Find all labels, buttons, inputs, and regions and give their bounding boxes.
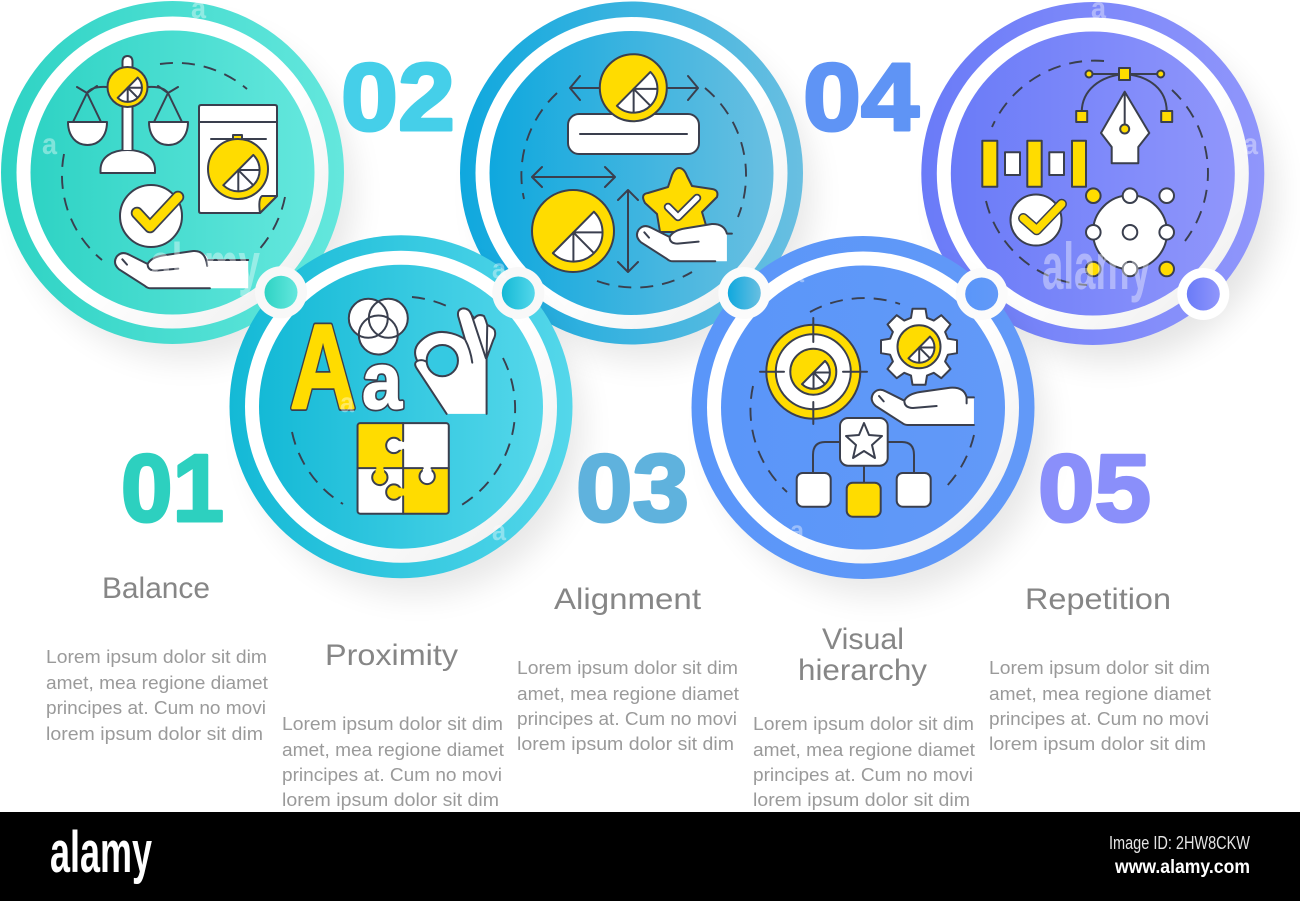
icon: gear with lemon: [881, 309, 957, 385]
icon: type specimen Aa: a: [362, 336, 402, 425]
icon: circle with anchor nodes: [1086, 188, 1174, 276]
heading: Visual hierarchy: [798, 623, 927, 687]
heading: Proximity: Proximity: [325, 639, 458, 672]
text block: Repetition: lorem ipsum dolor sit dim: [989, 733, 1206, 754]
connector dot 5: [1177, 268, 1229, 320]
text block: Visual hierarchy: amet, mea regione diamet: [753, 739, 975, 760]
icon: puzzle: [358, 423, 449, 514]
panel: circle 05 repetition: [921, 2, 1276, 362]
watermark overlays: a: [340, 387, 354, 418]
text block: Repetition: principes at. Cum no movi: [989, 708, 1209, 729]
text block: Alignment: Lorem ipsum dolor sit dim: [517, 657, 738, 678]
footer image id: Image ID: 2HW8CKW: [1109, 833, 1250, 853]
footer url: www.alamy.com: [1114, 857, 1250, 878]
connector dot 4: [956, 268, 1008, 320]
text block: Repetition: Lorem ipsum dolor sit dim: [989, 657, 1210, 678]
text block: Balance: principes at. Cum no movi: [46, 697, 266, 718]
text block: Balance: lorem ipsum dolor sit dim: [46, 723, 263, 744]
heading: Visual hierarchy: Visual: [822, 623, 904, 656]
connector dot 2: [492, 267, 544, 319]
icon: open hand: [115, 251, 248, 288]
text block: Proximity: amet, mea regione diamet: [282, 739, 504, 760]
watermark overlays: alamy: [1042, 229, 1151, 303]
text block: Alignment: principes at. Cum no movi: [517, 708, 737, 729]
connector dot 3: [718, 267, 770, 319]
number 01: 01: [121, 435, 224, 542]
icon: lower lemon with measure arrows: [532, 167, 638, 272]
icon: check badge: [120, 185, 182, 247]
icon: open hand: [872, 388, 974, 425]
icon: hierarchy chart: [797, 418, 931, 517]
text block: Visual hierarchy: principes at. Cum no movi: [753, 764, 973, 785]
icon: lemon target: [760, 318, 867, 424]
number 03: 03: [576, 435, 689, 542]
text block: Repetition: [989, 657, 1211, 754]
footer logo: alamy: [50, 820, 152, 885]
panel: circle 04 visual hierarchy: [692, 236, 1046, 596]
icon: venn circles: [349, 299, 408, 354]
watermark overlays: a: [42, 128, 57, 161]
icon: type specimen Aa: A: [290, 300, 356, 434]
icon: star in hand: [637, 168, 732, 261]
text block: Alignment: [517, 657, 739, 754]
watermark overlays: [42, 0, 1258, 546]
icon: balance scale: [68, 56, 188, 173]
icon: document with lemon: [199, 105, 277, 213]
icon: ok hand gesture: [415, 308, 495, 414]
text block: Visual hierarchy: Lorem ipsum dolor sit dim: [753, 713, 974, 734]
icon: alternating bars: [982, 141, 1086, 187]
heading: Visual hierarchy: hierarchy: [798, 654, 927, 687]
watermark overlays: a: [492, 515, 506, 546]
text block: Balance: amet, mea regione diamet: [46, 672, 268, 693]
panel: circle 01 balance: [1, 1, 354, 360]
text block: Proximity: principes at. Cum no movi: [282, 764, 502, 785]
number 04: 04: [803, 44, 919, 151]
panel: circle 02 proximity: [230, 235, 583, 595]
heading: Balance: Balance: [102, 572, 210, 605]
text block: Repetition: amet, mea regione diamet: [989, 683, 1211, 704]
text block: Proximity: Lorem ipsum dolor sit dim: [282, 713, 503, 734]
watermark overlays: a: [790, 257, 804, 288]
footer bar: [0, 812, 1300, 901]
text block: Visual hierarchy: [753, 713, 975, 810]
text block: Balance: [46, 646, 268, 744]
text block: Alignment: lorem ipsum dolor sit dim: [517, 733, 734, 754]
text block: Alignment: amet, mea regione diamet: [517, 683, 739, 704]
watermark overlays: a: [1243, 128, 1258, 161]
text block: Visual hierarchy: lorem ipsum dolor sit dim: [753, 789, 970, 810]
watermark overlays: a: [790, 515, 804, 546]
text block: Balance: Lorem ipsum dolor sit dim: [46, 646, 267, 667]
heading: Repetition: Repetition: [1025, 583, 1171, 616]
text block: Proximity: lorem ipsum dolor sit dim: [282, 789, 499, 810]
icon: top lemon with arrows: [568, 54, 699, 154]
watermark overlays: a: [492, 253, 506, 284]
number 05: 05: [1038, 435, 1151, 542]
text block: Proximity: [282, 713, 504, 810]
panel: circle 03 alignment: [460, 2, 813, 361]
watermark overlays: alamy: [150, 232, 260, 297]
icon: check badge: [1010, 194, 1062, 246]
number 02: 02: [341, 44, 455, 151]
icon: type specimen Aa: a: [362, 336, 402, 425]
icon: type specimen Aa: A: [290, 300, 356, 434]
connector dot 1: [255, 266, 307, 318]
heading: Alignment: Alignment: [554, 583, 702, 616]
icon: bezier pen tool: [1076, 68, 1172, 163]
